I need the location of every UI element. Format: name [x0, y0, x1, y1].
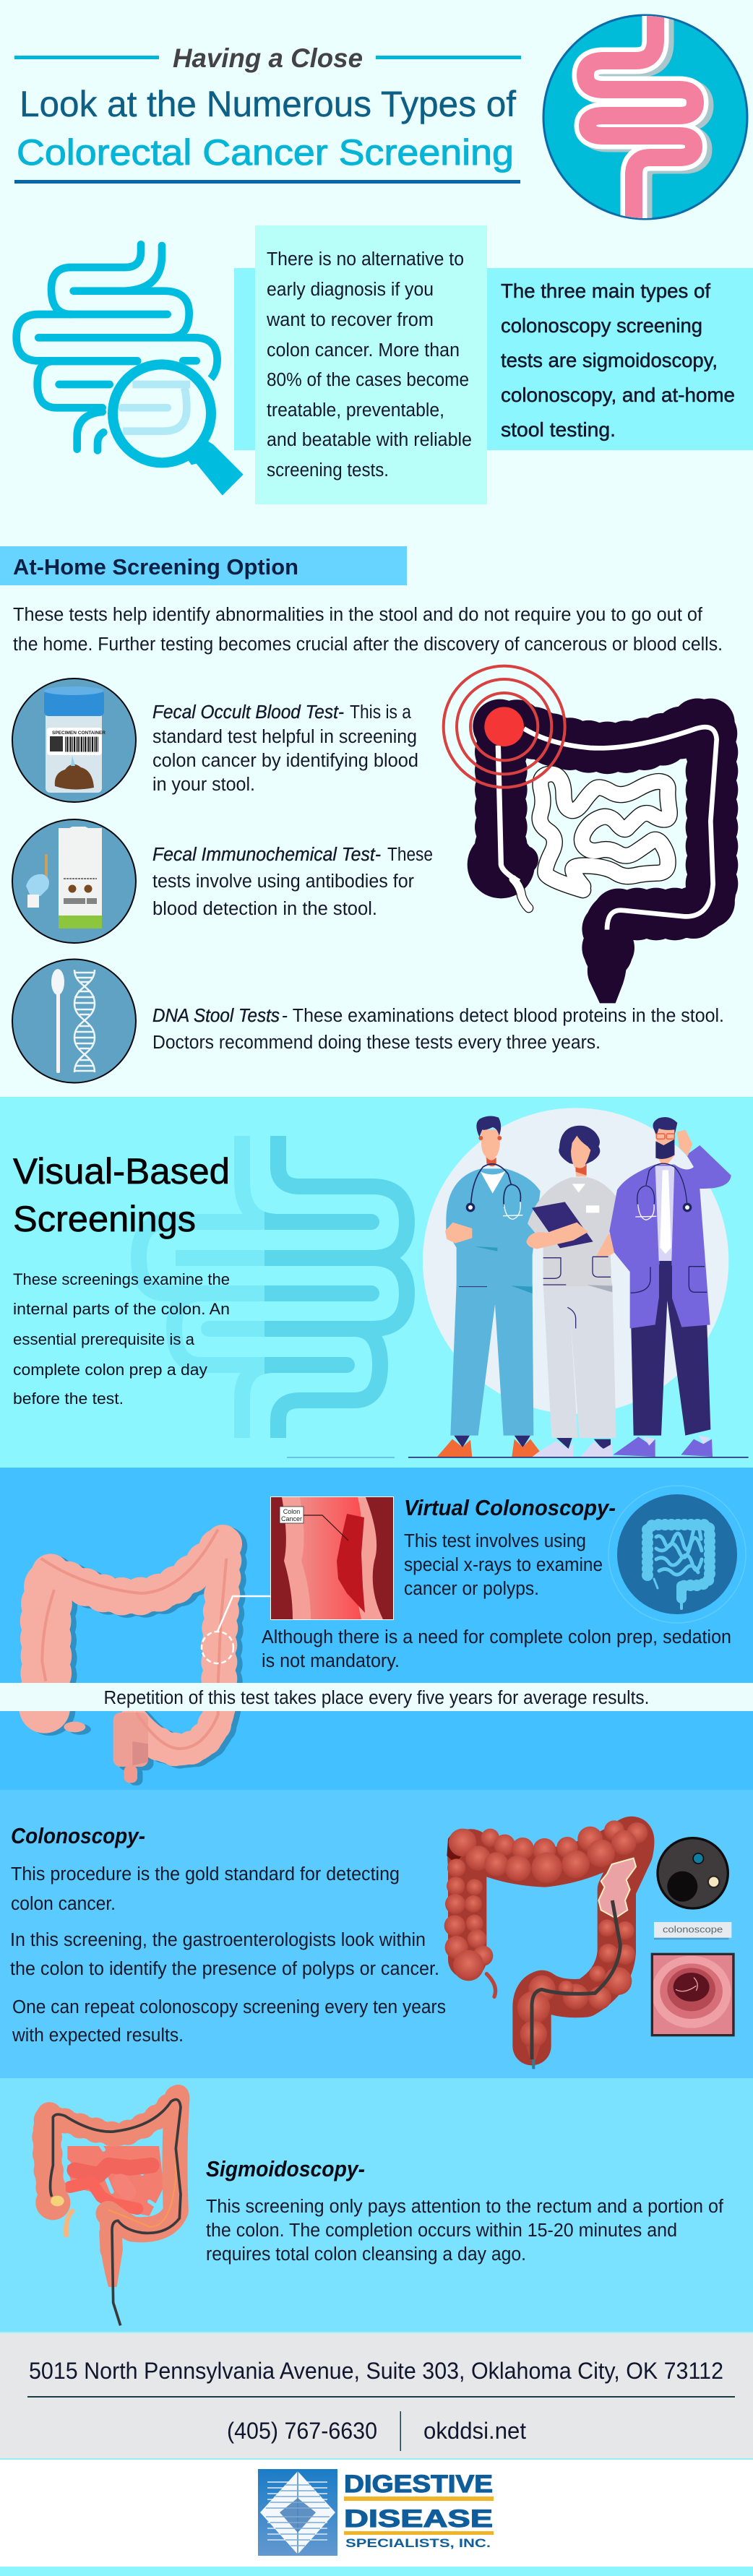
text: sedation note: is not mandatory.	[262, 1651, 400, 1671]
text: sigmoidoscopy: Sigmoidoscopy-	[206, 2156, 365, 2181]
footer contact panel	[0, 2332, 753, 2460]
text: fecal immunochemical test	[152, 845, 433, 919]
text: fecal immunochemical test: tests involve using antibodies for	[152, 871, 414, 892]
section background: colonoscopy	[0, 1790, 753, 2078]
text: fecal immunochemical test: These	[387, 845, 433, 865]
panel: early diagnosis text: 80% of the cases become	[267, 370, 469, 390]
text: visual-based description: essential prerequisite is a	[13, 1330, 195, 1348]
ground line	[287, 1457, 749, 1458]
panel: early diagnosis text: want to recover from	[266, 310, 434, 330]
leader line and dashed circle	[202, 1596, 270, 1663]
text: fecal occult blood test: standard test helpful in screening	[152, 727, 417, 747]
text: visual-based description: complete colon prep a day	[13, 1361, 207, 1379]
text: virtual colonoscopy: special x-rays to examine	[404, 1555, 603, 1575]
text: sigmoidoscopy: requires total colon cleansing a day ago.	[206, 2244, 526, 2265]
text: sigmoidoscopy: the colon. The completion occurs within 15-20 minutes and	[206, 2220, 677, 2241]
panel: three main types text: stool testing.	[501, 418, 616, 441]
icon: intestine with magnifier	[17, 244, 244, 496]
footer contact panel: okddsi.net	[423, 2418, 526, 2444]
text: fecal occult blood test: This is a	[350, 702, 412, 723]
logo: digestive disease specialists: SPECIALISTS, INC.	[345, 2536, 491, 2550]
bottom band	[0, 2567, 753, 2576]
icon: intestines in dark blue circle	[608, 1486, 746, 1623]
text: visual-based description: internal parts of the colon. An	[13, 1300, 230, 1318]
text: colonoscopy: the colon to identify the presence of polyps or cancer.	[10, 1959, 439, 1979]
panel: early diagnosis text: early diagnosis if you	[267, 280, 434, 300]
text: fecal occult blood test: Fecal Occult Blood Test-	[152, 702, 344, 723]
illustration: peach colon	[41, 1530, 229, 1785]
text: colonoscopy: Colonoscopy-	[11, 1823, 145, 1848]
colonoscope tip	[658, 1838, 728, 1908]
logo: digestive disease specialists: DISEASE	[344, 2505, 493, 2533]
section background: sigmoidoscopy	[0, 2078, 753, 2332]
doctor: purple coat	[609, 1117, 731, 1457]
section background: visual-based screenings	[0, 1097, 753, 1468]
inset: colon cancer close-up: Cancer	[281, 1515, 302, 1522]
text: virtual colonoscopy: Virtual Colonoscopy-	[404, 1495, 616, 1520]
doctor: grey scrubs	[526, 1126, 632, 1457]
panel: three main types text: tests are sigmoidoscopy,	[501, 349, 718, 371]
icon: specimen container: SPECIMEN CONTAINER	[52, 731, 106, 736]
icon: specimen container	[12, 679, 136, 802]
text: fecal immunochemical test: Fecal Immunochemical Test-	[152, 845, 381, 865]
panel: early diagnosis text: colon cancer. More than	[267, 340, 460, 361]
white logo band	[0, 2460, 753, 2567]
illustration: red colon with scope	[444, 1820, 735, 2069]
text: DNA stool tests: DNA Stool Tests	[152, 1006, 280, 1026]
doctor: blue scrubs	[437, 1116, 541, 1457]
text: virtual colonoscopy: This test involves using	[404, 1531, 586, 1551]
logo: digestive disease specialists	[258, 2469, 494, 2556]
icon: intestine in circle	[543, 11, 747, 227]
text: visual-based description: These screenings examine the	[13, 1270, 230, 1288]
text: DNA stool tests	[152, 1006, 724, 1053]
title block: Having a Close	[173, 43, 363, 73]
strip: repetition note	[0, 1683, 753, 1711]
text: sedation note: Although there is a need for complete colon prep, sedation	[262, 1627, 731, 1647]
panel: three main types text: The three main types of	[501, 280, 710, 302]
strip: repetition note: Repetition of this test takes place every five years for average results.	[104, 1688, 649, 1708]
text: fecal occult blood test	[152, 702, 418, 795]
panel: early diagnosis text	[255, 225, 487, 504]
colonoscope label	[654, 1922, 731, 1939]
title block: Colorectal Cancer Screening	[17, 132, 514, 173]
decorative intestine watermark	[139, 1136, 407, 1438]
text: sigmoidoscopy	[206, 2156, 724, 2265]
footer contact panel: (405) 767-6630	[227, 2418, 377, 2444]
endoscopic view	[651, 1953, 735, 2036]
text: virtual colonoscopy	[404, 1495, 616, 1599]
heading: at-home screening: At-Home Screening Option	[13, 554, 298, 580]
inset: colon cancer close-up: Colon	[283, 1508, 300, 1515]
text: colonoscopy: This procedure is the gold standard for detecting	[11, 1864, 400, 1884]
text: colonoscopy: colon cancer.	[11, 1894, 116, 1914]
panel: early diagnosis text: and beatable with reliable	[267, 430, 472, 450]
inset: colon cancer close-up	[270, 1496, 394, 1620]
text: DNA stool tests: Doctors recommend doing these tests every three years.	[152, 1033, 601, 1053]
heading: visual-based screenings: Screenings	[13, 1199, 196, 1239]
text: colonoscopy: In this screening, the gastroenterologists look within	[10, 1930, 426, 1950]
text: fecal immunochemical test: blood detection in the stool.	[152, 899, 377, 919]
text: virtual colonoscopy: cancer or polyps.	[404, 1579, 539, 1599]
at-home intro paragraph: These tests help identify abnormalities in the stool and do not require you to go out of	[13, 605, 703, 625]
text: fecal occult blood test: colon cancer by identifying blood	[152, 751, 418, 771]
illustration: colon with sigmoidoscope	[35, 2095, 181, 2325]
colonoscope label: colonoscope	[663, 1924, 723, 1934]
panel: early diagnosis text: treatable, preventable,	[267, 400, 444, 421]
text: visual-based description: before the test.	[13, 1390, 124, 1408]
text: DNA stool tests: - These examinations detect blood proteins in the stool.	[282, 1006, 724, 1026]
heading: visual-based screenings	[13, 1151, 230, 1239]
panel: three main types text	[501, 280, 735, 441]
illustration: three doctors	[287, 1108, 749, 1458]
illustration: dark colon with red target	[444, 666, 735, 1003]
heading: at-home screening	[0, 546, 407, 585]
icon: swab and DNA	[12, 960, 136, 1082]
at-home intro paragraph	[13, 605, 723, 655]
panel: three main types text: colonoscopy, and at-home	[501, 384, 735, 406]
text: colonoscopy	[10, 1823, 446, 2046]
title block	[14, 43, 521, 184]
text: visual-based description	[13, 1270, 230, 1408]
text: colonoscopy: with expected results.	[12, 2025, 184, 2046]
text: sedation note	[262, 1627, 731, 1671]
heading: visual-based screenings: Visual-Based	[13, 1151, 230, 1192]
icon: immunochemical test card	[12, 819, 136, 943]
title block: Look at the Numerous Types of	[20, 84, 516, 124]
panel: early diagnosis text: There is no alternative to	[267, 249, 464, 270]
text: colonoscopy: One can repeat colonoscopy screening every ten years	[12, 1997, 446, 2017]
text: fecal occult blood test: in your stool.	[152, 775, 255, 795]
page background	[0, 0, 753, 1097]
panel: three main types text: colonoscopy screening	[501, 314, 702, 337]
text: sigmoidoscopy: This screening only pays attention to the rectum and a portion of	[206, 2197, 724, 2217]
at-home intro paragraph: the home. Further testing becomes crucial after the discovery of cancerous or blood cells.	[13, 634, 723, 655]
footer contact panel: 5015 North Pennsylvania Avenue, Suite 303, Oklahoma City, OK 73112	[29, 2358, 723, 2384]
logo: digestive disease specialists: DIGESTIVE	[344, 2471, 493, 2498]
section background: virtual colonoscopy	[0, 1468, 753, 1790]
band behind intro panels	[234, 268, 753, 450]
panel: early diagnosis text: screening tests.	[267, 460, 389, 481]
